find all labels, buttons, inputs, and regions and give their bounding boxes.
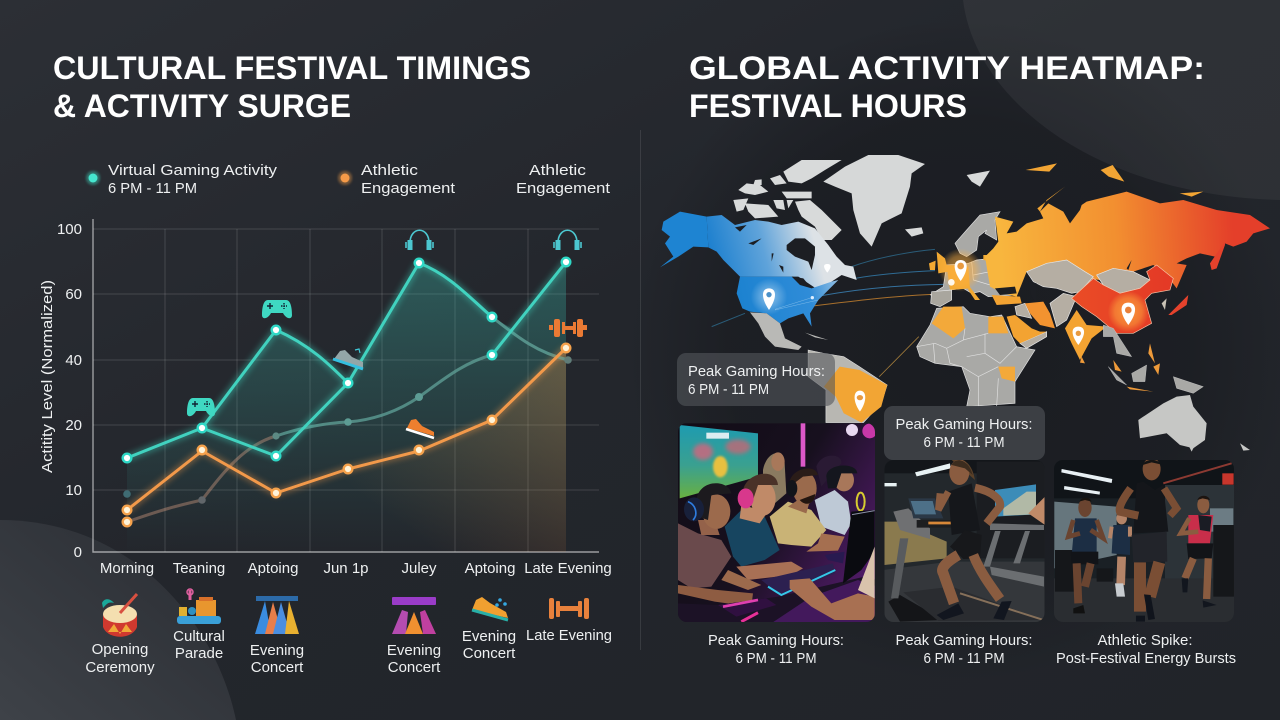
orange area fill	[127, 348, 566, 552]
strip lights	[884, 463, 951, 486]
icon: headphones one	[406, 230, 433, 250]
hudson bay and lakes	[735, 225, 815, 288]
event: evening concert stage two: Evening	[387, 642, 441, 659]
callout: peak gaming left: Peak Gaming Hours:	[688, 363, 825, 380]
x axis labels: Late Evening	[524, 560, 612, 577]
title: left panel: & ACTIVITY SURGE	[53, 88, 351, 124]
event: evening concert stage two: Concert	[388, 659, 441, 676]
y axis labels: 20	[65, 417, 82, 434]
festival event row	[85, 589, 612, 676]
y axis title: Actitity Level (Normalized)	[39, 280, 56, 473]
map: south america	[808, 337, 919, 423]
windows	[1054, 502, 1117, 568]
teal data points	[123, 258, 570, 462]
x axis labels: Teaning	[173, 560, 225, 577]
arctic coast islands	[1026, 163, 1203, 212]
man centre	[1120, 458, 1177, 622]
icon: gamepad high	[262, 300, 292, 318]
strip lights	[1061, 469, 1112, 495]
world heatmap	[660, 155, 1270, 452]
chart legend	[86, 162, 611, 197]
event: opening ceremony: Ceremony	[85, 659, 155, 676]
lamps	[846, 424, 858, 436]
event: late evening dumbbell: Late Evening	[526, 627, 612, 644]
photo: gamers	[678, 423, 878, 623]
desk	[678, 577, 878, 623]
person one	[678, 483, 761, 607]
floor	[1053, 578, 1235, 623]
event: opening ceremony	[85, 594, 155, 676]
southeast asia and indonesia	[1103, 325, 1203, 393]
chart grid and axes	[93, 219, 599, 552]
x axis labels: Aptoing	[248, 560, 298, 577]
event: evening concert stage one: Concert	[251, 659, 304, 676]
event: evening concert stage one	[250, 596, 304, 676]
chart legend: 6 PM - 11 PM	[108, 180, 197, 197]
tasmania and new zealand	[1188, 443, 1250, 452]
callout: peak gaming centre: Peak Gaming Hours:	[896, 416, 1032, 433]
callout: peak gaming left: 6 PM - 11 PM	[688, 381, 769, 398]
x axis labels: Morning	[100, 560, 154, 577]
event: evening concert stage two	[387, 597, 441, 676]
photo caption: gaming: Peak Gaming Hours:	[708, 632, 844, 649]
event: cultural parade: Parade	[175, 645, 223, 662]
line chart	[39, 219, 612, 577]
grey secondary line	[123, 317, 572, 522]
runner	[937, 459, 1012, 620]
orange islands	[1080, 343, 1160, 392]
korea	[1162, 298, 1167, 310]
photo caption: workout: Post-Festival Energy Bursts	[1056, 650, 1236, 667]
event: cultural parade	[173, 589, 225, 662]
teal area fill	[127, 262, 566, 552]
australia	[1138, 395, 1207, 448]
title: left panel: CULTURAL FESTIVAL TIMINGS	[53, 50, 531, 86]
neon strip	[801, 423, 805, 467]
gym equipment	[1055, 525, 1234, 597]
icon: orange dumbbell	[549, 319, 587, 337]
title: left panel	[53, 50, 531, 124]
chart legend: Engagement	[516, 180, 611, 197]
monitor	[843, 510, 875, 583]
alaska	[660, 212, 708, 267]
wall screen	[680, 425, 758, 498]
event: evening concert shoe: Evening	[462, 628, 516, 645]
europe	[930, 258, 1015, 297]
orange data points	[123, 344, 570, 526]
photo caption: workout	[1056, 632, 1236, 667]
photo caption: treadmill	[896, 632, 1032, 667]
photo caption: treadmill: Peak Gaming Hours:	[896, 632, 1032, 649]
y axis labels: 100	[57, 221, 82, 238]
background people	[763, 452, 832, 503]
y axis labels: 10	[65, 482, 82, 499]
foreground arm and shirt	[790, 578, 875, 620]
treadmill frame	[888, 498, 1043, 622]
wall screen	[995, 484, 1036, 517]
icon: gamepad low	[187, 398, 215, 416]
y axis labels: 40	[65, 352, 82, 369]
mirror reflection	[884, 522, 947, 565]
usa pin	[751, 264, 831, 315]
event: evening concert shoe	[462, 597, 516, 662]
canada	[707, 215, 857, 290]
rear treadmill	[983, 523, 1044, 587]
chart legend: Athletic	[529, 162, 587, 179]
turkey iran arabia india	[992, 295, 1107, 360]
title: right panel	[689, 50, 1205, 124]
y axis labels	[57, 221, 82, 561]
teal line series	[127, 262, 566, 458]
map: americas and greenland	[660, 155, 990, 350]
x axis labels	[100, 560, 612, 577]
photo caption: gaming: 6 PM - 11 PM	[736, 650, 816, 667]
africa	[917, 307, 1035, 407]
usa	[737, 277, 838, 327]
photo: group workout	[1053, 458, 1235, 623]
europe borders	[972, 260, 1003, 285]
photo caption: treadmill: 6 PM - 11 PM	[924, 650, 1004, 667]
iberia	[931, 290, 952, 307]
pin glows and pins	[939, 248, 1149, 345]
uk and france	[929, 252, 993, 300]
y axis labels: 60	[65, 286, 82, 303]
callout: peak gaming centre	[884, 406, 1045, 460]
scandinavia	[955, 212, 1000, 257]
event: evening concert stage one: Evening	[250, 642, 304, 659]
event: late evening dumbbell	[526, 598, 612, 644]
event: cultural parade: Cultural	[173, 628, 225, 645]
photo caption: gaming	[708, 632, 844, 667]
photo: treadmill runner	[883, 458, 1047, 623]
second person hand	[1028, 497, 1045, 525]
woman left	[1068, 498, 1103, 613]
person three	[770, 468, 845, 552]
seas	[995, 260, 1132, 303]
chart legend: Virtual Gaming Activity	[108, 162, 278, 179]
callout: peak gaming left	[677, 353, 835, 406]
person two	[725, 474, 803, 580]
event: evening concert shoe: Concert	[463, 645, 516, 662]
icon: headphones two	[554, 230, 581, 250]
japan	[1168, 242, 1225, 315]
title: right panel: FESTIVAL HOURS	[689, 88, 967, 124]
x axis labels: Juley	[401, 560, 437, 577]
mexico and caribbean	[750, 312, 828, 350]
greenland	[823, 155, 925, 247]
x axis labels: Aptoing	[465, 560, 515, 577]
title: right panel: GLOBAL ACTIVITY HEATMAP:	[689, 50, 1205, 86]
woman middle	[1110, 512, 1130, 597]
photo caption: workout: Athletic Spike:	[1098, 632, 1192, 649]
chart legend: Engagement	[361, 180, 456, 197]
x axis labels: Jun 1p	[323, 560, 369, 577]
map: brazil pin	[855, 391, 865, 412]
icon: orange running shoe	[406, 419, 434, 438]
y axis labels: 0	[74, 544, 82, 561]
person four	[815, 466, 857, 535]
callout: peak gaming centre: 6 PM - 11 PM	[924, 434, 1004, 451]
keyboards	[718, 552, 845, 622]
floor	[883, 562, 1047, 623]
orange line series	[127, 348, 566, 510]
chart legend: Athletic	[361, 162, 419, 179]
africa borders	[917, 328, 1017, 407]
russia heat	[985, 192, 1270, 297]
arctic islands	[733, 160, 990, 240]
icon: grey running shoe	[333, 349, 363, 369]
woman right	[1181, 496, 1217, 608]
connection lines to europe	[712, 249, 943, 327]
china	[1072, 265, 1173, 333]
map: eurasia africa oceania	[917, 163, 1270, 452]
central asia	[1015, 260, 1150, 348]
african orange countries	[932, 307, 1015, 382]
event: opening ceremony: Opening	[92, 641, 148, 658]
